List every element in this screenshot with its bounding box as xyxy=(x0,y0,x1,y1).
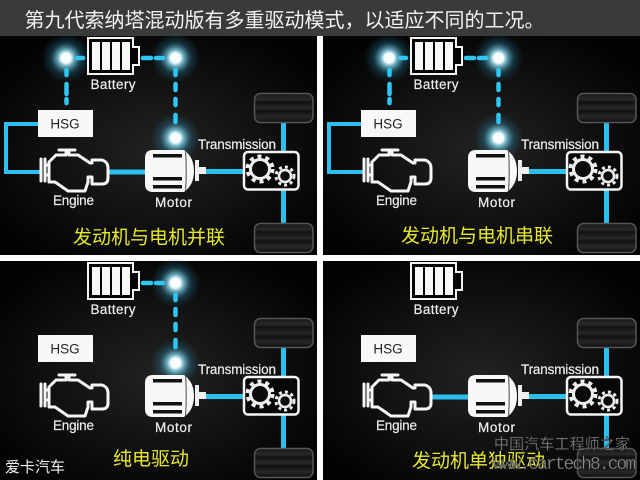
icon: engine xyxy=(364,150,431,191)
label: motor: Motor xyxy=(478,420,516,435)
icon: motor xyxy=(145,150,206,192)
icon: top wheel xyxy=(254,94,313,122)
label: battery: Battery xyxy=(414,77,459,92)
icon: motor xyxy=(468,375,529,417)
icon: motor xyxy=(145,375,206,417)
label: engine: Engine xyxy=(376,418,417,433)
panel: electric only xyxy=(0,258,317,480)
caption: 发动机单独驱动 xyxy=(412,450,545,472)
title: 第九代索纳塔混动版有多重驱动模式，以适应不同的工况。 xyxy=(24,9,544,32)
flow: dashed electric links xyxy=(364,33,524,163)
flow: power links xyxy=(205,346,284,449)
label: engine: Engine xyxy=(53,193,94,208)
label: motor: Motor xyxy=(155,420,192,435)
icon: battery xyxy=(88,38,139,74)
watermark xyxy=(493,436,636,475)
watermark: www.cartech8.com xyxy=(493,455,636,475)
icon: transmission gears xyxy=(567,377,622,414)
icon: transmission gears xyxy=(244,377,298,414)
caption: 发动机与电机并联 xyxy=(73,226,225,248)
flow: dashed electric links xyxy=(143,258,200,388)
flow: dashed electric links xyxy=(41,33,200,163)
box: HSG xyxy=(361,110,416,137)
label: battery: Battery xyxy=(90,77,136,92)
icon: battery xyxy=(88,263,139,299)
caption: 发动机与电机串联 xyxy=(401,225,553,247)
title bar xyxy=(0,0,640,36)
panel: engine only xyxy=(323,261,640,480)
label: transmission: Transmission xyxy=(521,137,599,152)
icon: battery xyxy=(411,263,462,299)
box: HSG xyxy=(361,335,416,362)
box: HSG: HSG xyxy=(373,116,403,132)
flow: power links xyxy=(431,346,606,449)
box: HSG xyxy=(38,335,93,362)
box: HSG: HSG xyxy=(373,342,403,356)
watermark: 中国汽车工程师之家 xyxy=(494,436,630,453)
label: motor: Motor xyxy=(155,195,192,210)
label: engine: Engine xyxy=(376,193,417,208)
icon: bottom wheel xyxy=(254,448,313,478)
source logo text: 爱卡汽车 xyxy=(5,459,65,476)
icon: engine xyxy=(41,150,108,191)
label: transmission: Transmission xyxy=(521,362,599,377)
label: transmission: Transmission xyxy=(198,137,276,152)
icon: top wheel xyxy=(254,318,313,348)
flow: power links xyxy=(6,121,284,224)
icon: transmission gears xyxy=(244,152,298,190)
caption: 纯电驱动 xyxy=(113,448,189,470)
box: HSG: HSG xyxy=(50,342,80,356)
panel: engine and motor in series xyxy=(323,33,640,255)
label: motor: Motor xyxy=(478,195,516,210)
label: battery: Battery xyxy=(414,302,459,317)
box: HSG: HSG xyxy=(50,116,80,132)
panel: engine and motor in parallel xyxy=(0,33,317,255)
icon: motor xyxy=(468,150,529,192)
icon: bottom wheel xyxy=(578,224,636,252)
icon: bottom wheel xyxy=(254,224,313,252)
icon: bottom wheel xyxy=(578,448,636,478)
icon: engine xyxy=(364,375,431,416)
icon: engine xyxy=(41,375,108,416)
label: engine: Engine xyxy=(53,418,94,433)
icon: transmission gears xyxy=(567,152,622,190)
icon: top wheel xyxy=(578,318,636,348)
icon: top wheel xyxy=(578,94,636,122)
flow: power links xyxy=(329,121,606,224)
icon: battery xyxy=(411,38,462,74)
label: battery: Battery xyxy=(90,302,136,317)
box: HSG xyxy=(38,110,93,137)
label: transmission: Transmission xyxy=(198,362,276,377)
